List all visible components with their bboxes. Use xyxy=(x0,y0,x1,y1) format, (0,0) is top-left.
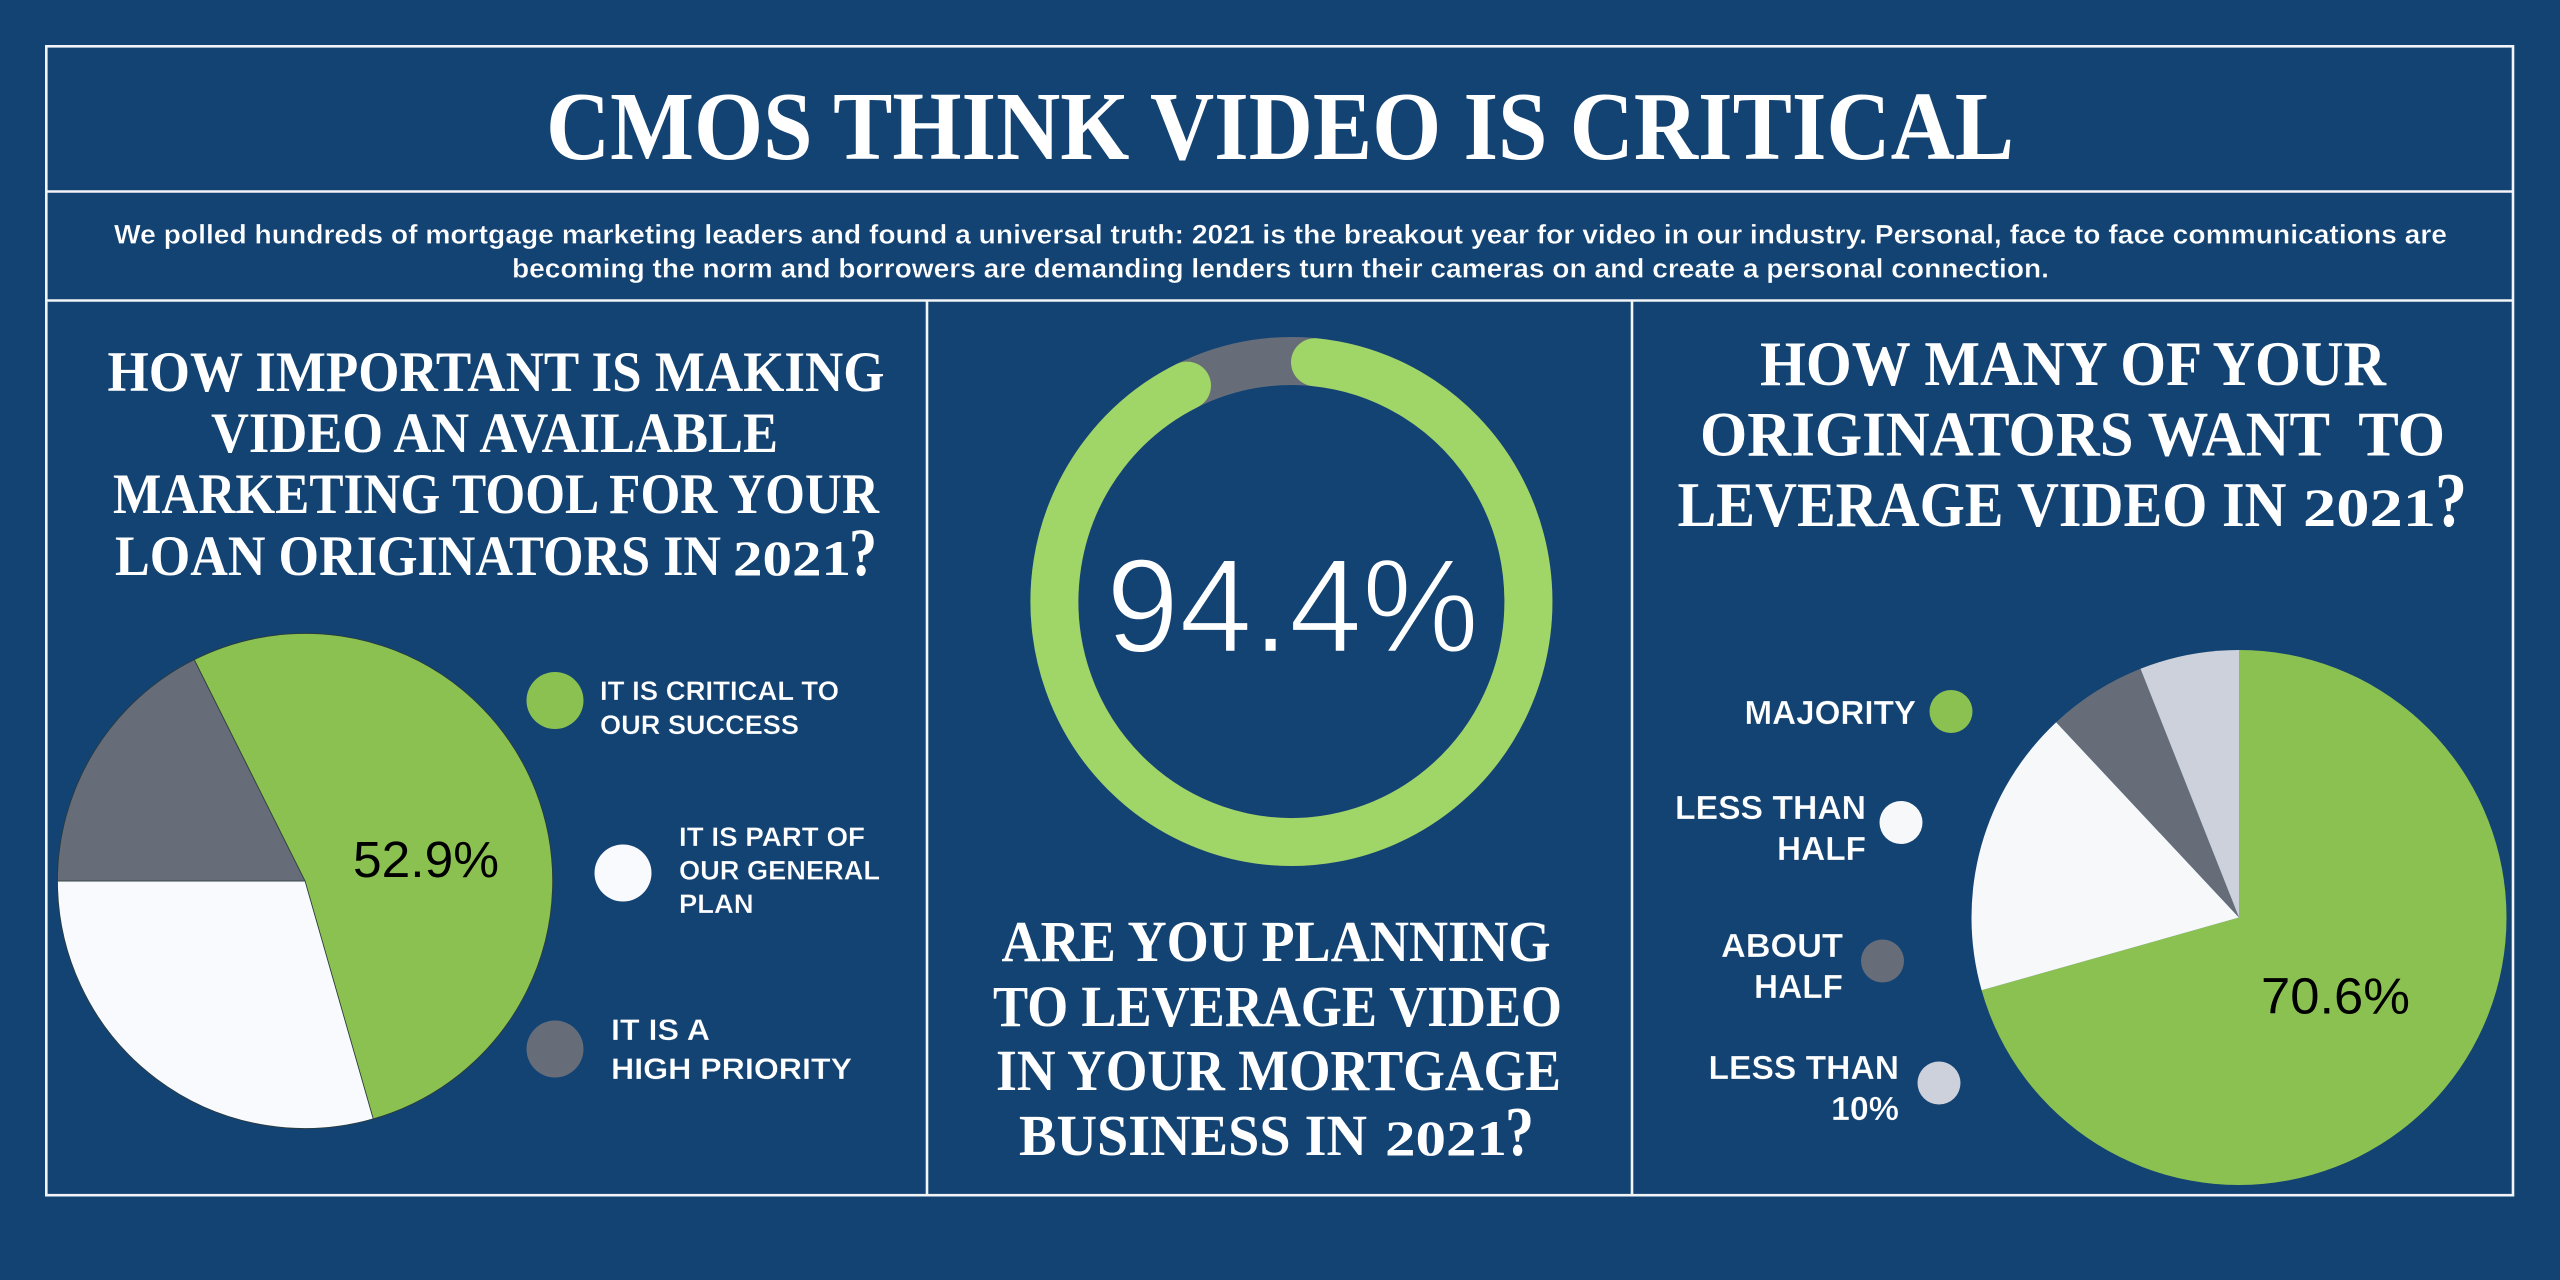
panel: how many originators xyxy=(1675,328,2507,1185)
heading: how important: MARKETING TOOL FOR YOUR xyxy=(113,463,880,526)
legend: about half: ABOUT xyxy=(1721,927,1843,964)
heading: how many: 2021 xyxy=(2303,478,2436,538)
title: CMOS THINK VIDEO IS CRITICAL xyxy=(546,73,2014,181)
heading: how many: ? xyxy=(2435,457,2467,543)
legend: less than 10%: LESS THAN xyxy=(1708,1049,1899,1086)
intro line 1: We polled hundreds of mortgage marketing leaders and found a universal truth: 2021 is the breakout year for video in our industry. Personal, face to face communications are xyxy=(114,220,2447,250)
pie value label: 70.6% xyxy=(2261,968,2410,1024)
intro text xyxy=(114,220,2447,284)
heading: how many xyxy=(1678,328,2467,543)
intro line 2: becoming the norm and borrowers are demanding lenders turn their cameras on and create a personal connection. xyxy=(512,254,2049,284)
heading: how many: HOW MANY OF YOUR xyxy=(1760,328,2387,399)
heading: are you planning: 2021 xyxy=(1385,1110,1507,1166)
heading: how many: LEVERAGE VIDEO IN xyxy=(1678,469,2286,540)
pie chart: importance xyxy=(58,633,553,1128)
heading: how important: HOW IMPORTANT IS MAKING xyxy=(108,341,884,404)
legend: critical: OUR SUCCESS xyxy=(600,710,799,740)
legend: less than half: LESS THAN xyxy=(1675,789,1866,826)
donut value: 94.4% xyxy=(1106,532,1479,681)
heading: are you planning xyxy=(993,909,1562,1171)
legend: less than half xyxy=(1675,789,1922,867)
heading: are you planning: BUSINESS IN xyxy=(1019,1103,1367,1168)
legend: less than 10% xyxy=(1708,1049,1960,1127)
heading: are you planning: TO LEVERAGE VIDEO xyxy=(993,974,1562,1039)
heading: how important: 2021 xyxy=(733,530,851,586)
legend: general plan xyxy=(594,822,880,919)
donut chart 94.4% xyxy=(1054,361,1528,842)
heading: how important: LOAN ORIGINATORS IN xyxy=(115,525,721,588)
pie value label: 52.9% xyxy=(353,831,499,888)
panel: importance of video xyxy=(58,341,884,1128)
legend: high priority: IT IS A xyxy=(611,1014,710,1047)
heading: how important xyxy=(108,341,884,590)
heading: are you planning: ? xyxy=(1505,1094,1534,1171)
heading: how important: VIDEO AN AVAILABLE xyxy=(211,402,778,465)
legend: less than 10%: 10% xyxy=(1831,1090,1899,1127)
pie chart: originators xyxy=(1972,650,2507,1185)
heading: how important: ? xyxy=(849,514,877,590)
legend: critical xyxy=(526,672,839,740)
heading: are you planning: IN YOUR MORTGAGE xyxy=(996,1038,1561,1103)
legend: general plan: IT IS PART OF xyxy=(679,822,865,852)
legend: general plan: PLAN xyxy=(679,889,754,919)
legend: high priority: HIGH PRIORITY xyxy=(611,1053,852,1086)
legend: about half: HALF xyxy=(1754,968,1843,1005)
legend: majority: MAJORITY xyxy=(1744,694,1916,731)
legend: about half xyxy=(1721,927,1904,1005)
legend: critical: IT IS CRITICAL TO xyxy=(600,676,839,706)
legend: high priority xyxy=(526,1014,852,1086)
legend: majority xyxy=(1744,690,1972,733)
legend: less than half: HALF xyxy=(1777,830,1866,867)
heading: how many: ORIGINATORS WANT TO xyxy=(1700,398,2445,470)
legend: general plan: OUR GENERAL xyxy=(679,856,880,886)
panel: planning to leverage video xyxy=(993,361,1562,1171)
heading: are you planning: ARE YOU PLANNING xyxy=(1002,909,1550,974)
